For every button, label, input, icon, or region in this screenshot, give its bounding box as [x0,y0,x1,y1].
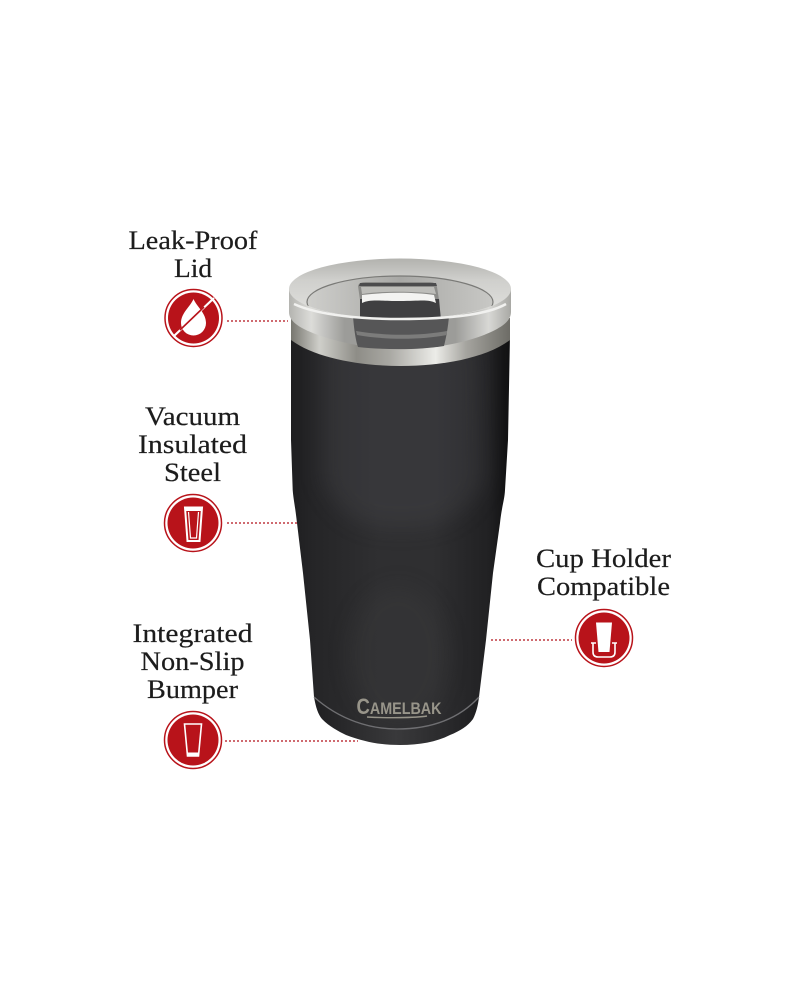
icon: cup in holder [576,610,632,666]
lid window band [356,331,447,339]
sip opening dark well [360,299,441,320]
bumper seam [314,697,479,729]
label: Cup Holder [536,544,671,573]
brand underline [367,716,427,718]
upper body sheen [328,356,480,513]
label: Lid [174,254,212,283]
connector [491,639,572,641]
tumbler base bumper [314,697,479,745]
lid top [289,258,511,320]
lid front edge [294,304,506,319]
label [128,226,258,283]
label: Steel [164,458,221,487]
steel band [291,318,510,366]
label: Insulated [138,430,247,459]
label: Compatible [537,572,670,601]
lid inner recess [306,275,494,316]
callout: vacuum insulated steel [138,402,297,552]
label: Integrated [132,619,252,648]
connector [227,320,288,322]
label: Bumper [147,675,238,704]
label [138,402,247,487]
tumbler body [291,335,510,729]
sip opening glass base [358,282,439,300]
icon: cup with bumper [164,712,222,768]
callout: leak-proof lid [128,226,288,346]
connector [227,522,297,524]
icon: crossed-out water drop [165,290,222,346]
lid inner recess and sip opening [306,275,494,318]
lid rim [289,289,511,349]
label [536,544,671,601]
brand mark: CAMELBAK [356,694,442,719]
label: Vacuum [145,402,240,431]
label: Non-Slip [140,647,244,676]
callout: integrated non-slip bumper [132,619,358,768]
callout: cup holder compatible [491,544,671,666]
sip opening highlight [362,293,436,303]
tumbler [289,258,511,745]
label [132,619,252,704]
lid window over dark cup [353,316,449,349]
label: Leak-Proof [128,226,258,255]
sip opening top shadow [359,283,437,286]
icon: double-wall cup [164,494,222,552]
connector [225,740,358,742]
sip opening glass [361,287,436,294]
